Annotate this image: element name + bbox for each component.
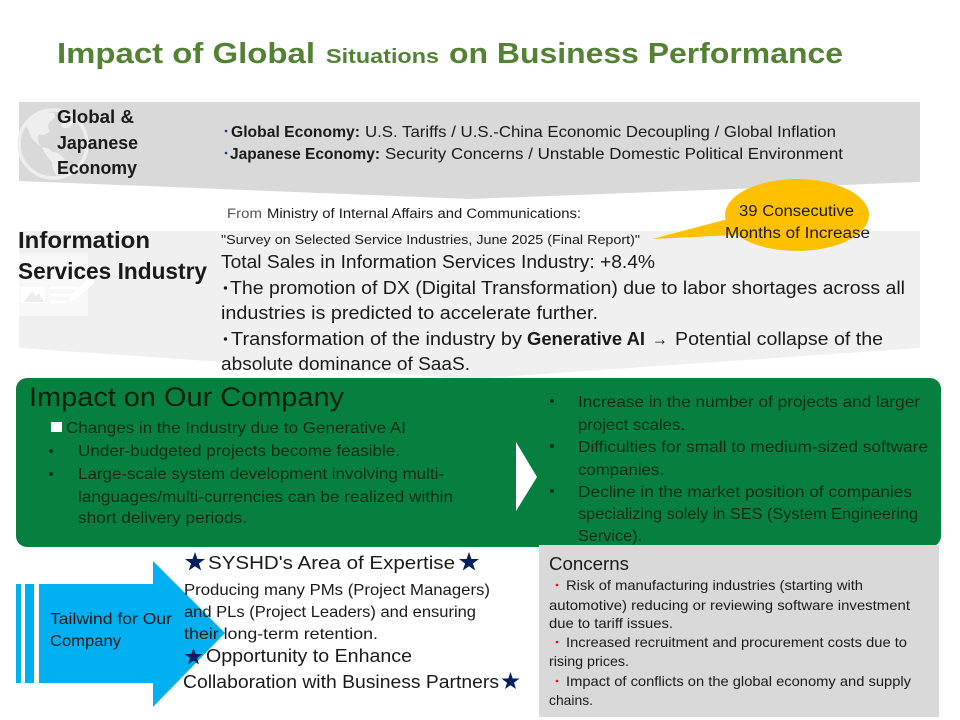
text: source: Ministry of Internal Affairs and Communications: — [267, 206, 581, 221]
text: concerns list: Risk of manufacturing industries (starting with — [566, 577, 863, 593]
text: generative AI changes: languages/multi-currencies can be realized within — [78, 489, 453, 506]
text: economy factors: Global Economy: — [231, 124, 360, 141]
panel: information services industry — [18, 206, 920, 379]
arrow: tailwind for our company: Company — [50, 633, 121, 650]
title: on Business Performance — [449, 38, 843, 70]
text: SYSHD area of expertise: Producing many PMs (Project Managers) — [184, 582, 490, 599]
text: industry details: industries is predicted to accelerate further. — [221, 303, 598, 323]
title: Situations — [326, 46, 439, 68]
text: economy factors: U.S. Tariffs / U.S.-China Economic Decoupling / Global Inflation — [365, 124, 836, 141]
heading: impact on our company: Impact on Our Company — [29, 382, 345, 412]
heading: global and Japanese economy: Global & — [57, 107, 134, 127]
text: economy factors: Japanese Economy: — [230, 146, 380, 163]
heading: global and Japanese economy: Economy — [57, 158, 137, 178]
text: generative AI changes: Large-scale system development involving multi- — [78, 466, 444, 483]
text: economy factors — [225, 124, 844, 163]
heading: global and Japanese economy — [57, 107, 138, 178]
text: concerns list: Impact of conflicts on the global economy and supply — [566, 673, 911, 689]
text: concerns list: due to tariff issues. — [549, 615, 673, 631]
text: SYSHD area of expertise: their long-term retention. — [184, 626, 378, 643]
heading: global and Japanese economy: Japanese — [57, 133, 138, 153]
text: consequences: Difficulties for small to medium-sized software — [578, 439, 928, 456]
text: generative AI changes — [49, 420, 453, 527]
text: SYSHD area of expertise: and PLs (Project Leaders) and ensuring — [184, 604, 476, 621]
text: source — [221, 206, 640, 247]
text: industry details: Generative AI — [527, 329, 645, 349]
text: concerns list: Increased recruitment and procurement costs due to — [566, 634, 907, 650]
icon: globe — [19, 110, 87, 178]
text: industry details: Potential collapse of the — [675, 329, 883, 349]
icon: document — [19, 253, 95, 316]
text: industry details: → — [652, 329, 668, 349]
text: consequences: companies. — [578, 462, 664, 479]
text: economy factors: Security Concerns / Unstable Domestic Political Environment — [385, 146, 844, 163]
text: SYSHD area of expertise: Opportunity to Enhance — [206, 645, 412, 666]
callout: 39 consecutive months — [652, 179, 870, 251]
text: industry details: Total Sales in Information Services Industry: +8.4% — [221, 252, 655, 272]
text: industry details: The promotion of DX (Digital Transformation) due to labor shortages across all — [230, 278, 905, 298]
heading: information services industry — [18, 227, 207, 284]
text: concerns list: automotive) reducing or reviewing software investment — [549, 597, 910, 613]
text: consequences: Increase in the number of projects and larger — [578, 394, 921, 411]
text: consequences: Decline in the market position of companies — [578, 484, 912, 501]
text: consequences — [550, 394, 928, 545]
text: concerns list: chains. — [549, 692, 593, 708]
text: SYSHD area of expertise: Collaboration with Business Partners — [183, 671, 499, 692]
callout: 39 consecutive months: Months of Increase — [725, 225, 870, 242]
text: generative AI changes: short delivery periods. — [78, 510, 247, 527]
text: source: "Survey on Selected Service Industries, June 2025 (Final Report)" — [221, 233, 640, 247]
title: Impact of Global — [57, 38, 315, 70]
text: industry details — [221, 252, 905, 374]
title — [57, 38, 843, 70]
panel: global and Japanese economy — [19, 102, 920, 199]
text: industry details: Transformation of the industry by — [231, 329, 522, 349]
text: generative AI changes: Under-budgeted projects become feasible. — [78, 443, 400, 460]
text: concerns list — [549, 577, 911, 708]
text: industry details: absolute dominance of SaaS. — [221, 354, 470, 374]
text: source: From — [227, 206, 262, 221]
text: consequences: project scales. — [578, 417, 685, 434]
heading: information services industry: Services Industry — [18, 258, 207, 284]
text: concerns list: rising prices. — [549, 653, 629, 669]
arrow: tailwind for our company: Tailwind for Our — [50, 611, 173, 628]
text: consequences: specializing solely in SES (System Engineering — [578, 506, 918, 523]
text: SYSHD area of expertise — [183, 552, 520, 692]
arrow: white chevron — [516, 442, 537, 511]
callout: 39 consecutive months: 39 Consecutive — [739, 203, 854, 220]
heading: information services industry: Information — [18, 227, 150, 253]
arrow: tailwind for our company — [16, 561, 225, 707]
text: generative AI changes: Changes in the Industry due to Generative AI — [66, 420, 406, 437]
heading: concerns: Concerns — [549, 554, 629, 574]
text: consequences: Service). — [578, 528, 642, 545]
panel: concerns — [539, 545, 939, 717]
panel: impact on our company — [16, 378, 941, 547]
text: SYSHD area of expertise: SYSHD's Area of Expertise — [208, 552, 455, 573]
